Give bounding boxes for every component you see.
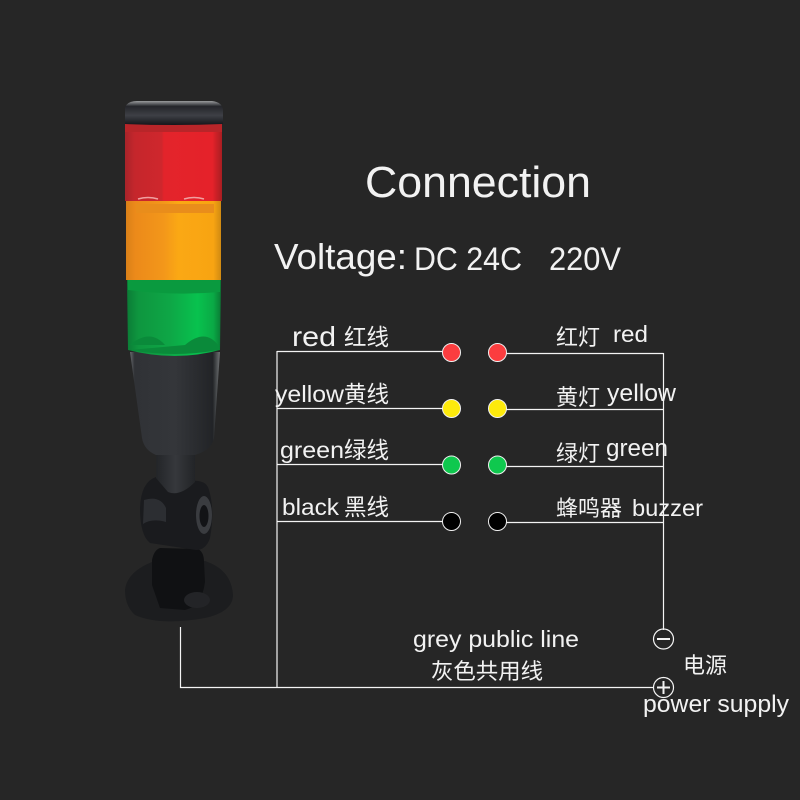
orange lamp <box>126 200 221 280</box>
tower neck <box>156 452 195 493</box>
tower black body <box>130 352 220 455</box>
tower top cap <box>125 101 223 125</box>
right lamp labels: yellow <box>607 380 677 407</box>
left terminals <box>442 344 460 530</box>
left wire labels: yellow <box>275 381 344 407</box>
green lamp lower shadow <box>130 336 218 354</box>
power supply label: power supply <box>643 691 789 718</box>
green lamp upper band <box>128 280 220 294</box>
tower base collar <box>152 548 205 610</box>
right lamp labels <box>556 321 703 521</box>
clamp screw inner <box>200 505 208 527</box>
orange lamp upper band <box>136 204 214 213</box>
plus terminal <box>654 678 674 698</box>
wiring lines <box>180 351 664 688</box>
right lamp labels: 蜂鸣器 <box>556 496 622 521</box>
title: Connection <box>365 158 591 207</box>
right lamp labels: 红灯 <box>556 325 600 350</box>
voltage values: DC 24C <box>414 241 522 277</box>
base screw slot <box>184 592 210 608</box>
left wire labels: 红线 <box>344 324 389 350</box>
right terminals <box>488 344 506 530</box>
voltage label: Voltage: <box>274 236 407 277</box>
grey public line Chinese label: 灰色共用线 <box>431 659 543 684</box>
red lamp upper band <box>125 124 222 132</box>
left wire labels: 黄线 <box>344 381 389 407</box>
clamp screw hole <box>196 496 212 534</box>
green lamp <box>127 279 221 356</box>
right lamp labels: red <box>613 321 648 347</box>
right lamp labels: green <box>606 435 668 462</box>
right lamp labels: buzzer <box>632 495 703 521</box>
left wire labels: black <box>282 494 340 520</box>
red lamp <box>125 122 222 201</box>
left wire labels: 黑线 <box>344 494 389 520</box>
clamp highlight <box>143 499 166 524</box>
minus terminal <box>654 629 674 649</box>
voltage values 220V: 220V <box>549 241 622 277</box>
tower mounting clamp <box>140 477 212 550</box>
left wire labels <box>275 321 389 520</box>
left wire labels: red <box>292 321 336 352</box>
red lamp bottom highlights <box>138 198 204 199</box>
power label Chinese: 电源 <box>683 653 727 678</box>
right lamp labels: 黄灯 <box>556 385 600 410</box>
grey public line label: grey public line <box>413 626 579 652</box>
left wire labels: 绿线 <box>344 437 389 463</box>
signal tower light <box>125 101 233 621</box>
tower base disc <box>125 561 233 621</box>
left wire labels: green <box>280 437 344 463</box>
right lamp labels: 绿灯 <box>556 441 600 466</box>
